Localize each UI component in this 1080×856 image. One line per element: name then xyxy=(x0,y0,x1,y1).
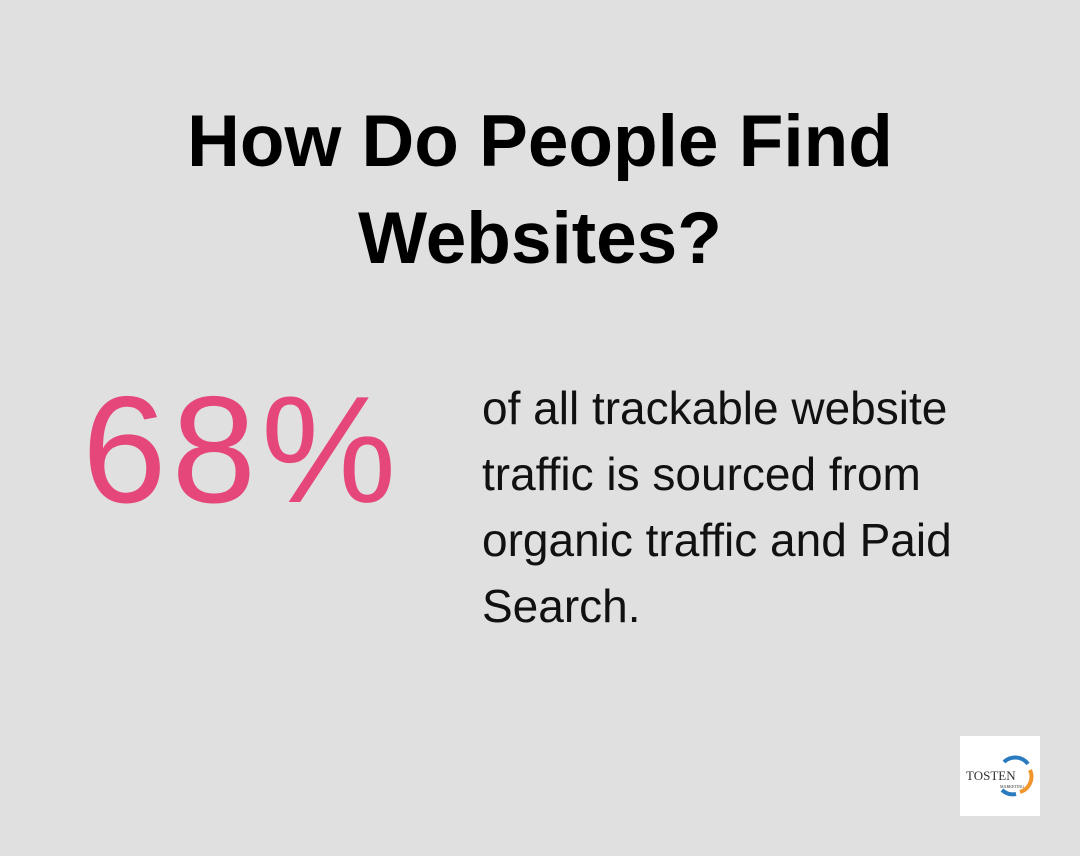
logo: MARKETING xyxy=(1000,784,1024,789)
logo xyxy=(960,736,1040,816)
title: How Do People Find xyxy=(187,101,893,182)
logo: TOSTEN xyxy=(966,768,1016,783)
title xyxy=(187,101,893,279)
big statistic: 68% xyxy=(82,365,401,535)
description text: of all trackable website traffic is sourced from organic traffic and Paid Search. xyxy=(482,382,952,632)
title: Websites? xyxy=(358,198,722,279)
